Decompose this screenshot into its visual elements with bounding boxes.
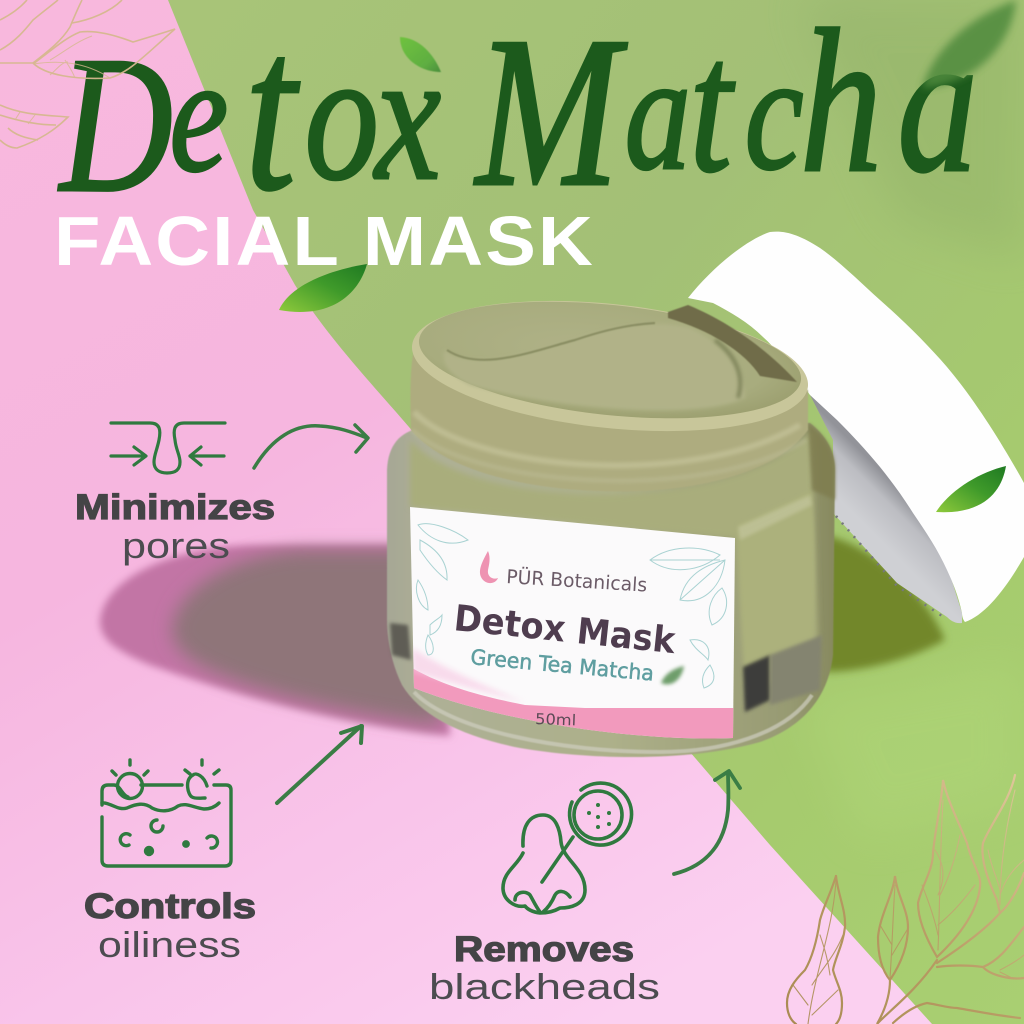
arrow: controls oiliness bbox=[277, 726, 362, 803]
label leaf decorations bbox=[416, 524, 727, 688]
title: D bbox=[58, 18, 173, 233]
label: removes blackheads bbox=[429, 930, 660, 1007]
label blurred leaf bbox=[661, 666, 684, 684]
lid white band bbox=[688, 232, 1024, 622]
gold leaves top left bbox=[0, 0, 175, 148]
label text: volume: 50ml bbox=[535, 710, 576, 729]
floating leaf: on lid bbox=[936, 466, 1006, 512]
jar lid bbox=[688, 232, 1024, 623]
cream surface bbox=[413, 285, 807, 435]
gold leaves bottom right bbox=[787, 775, 1024, 1024]
title bbox=[58, 0, 978, 239]
lid inner grey side bbox=[805, 385, 962, 623]
shadow of the jar on green bbox=[825, 535, 945, 672]
label: minimizes pores: Minimizes bbox=[75, 488, 275, 527]
cream creases bbox=[447, 323, 655, 360]
shadow of the jar on pink bbox=[100, 545, 450, 736]
floating leaf: beside subtitle bbox=[279, 264, 367, 312]
jar bottom glass rim bbox=[414, 692, 812, 752]
lid dotted thread bbox=[836, 516, 945, 618]
label pink band bbox=[414, 669, 734, 738]
title: o bbox=[305, 15, 379, 219]
icon: oily skin bbox=[102, 760, 231, 866]
jar body bbox=[387, 423, 835, 757]
label: controls oiliness: Controls bbox=[84, 887, 256, 926]
arrow: removes blackheads bbox=[674, 771, 740, 874]
jar bbox=[387, 284, 835, 757]
icon: pore bbox=[111, 423, 225, 473]
right shoulder shading bbox=[808, 423, 835, 500]
title: t bbox=[690, 2, 736, 212]
cream right panel bbox=[738, 492, 814, 684]
floating leaf: title bbox=[400, 37, 441, 72]
subtitle: FACIAL MASK bbox=[54, 202, 595, 280]
title: c bbox=[745, 22, 803, 204]
floating leaf: blurred top right bbox=[922, 0, 1016, 88]
jar label bbox=[405, 507, 735, 745]
soft light streaks on green bbox=[800, 0, 1024, 840]
title: x bbox=[373, 15, 441, 219]
label text: variant: Green Tea Matcha bbox=[470, 645, 655, 686]
jar neck bbox=[410, 350, 808, 491]
label: minimizes pores: pores bbox=[122, 525, 230, 566]
dark base corners bbox=[743, 655, 770, 712]
label: minimizes pores bbox=[75, 488, 275, 566]
label: removes blackheads: blackheads bbox=[429, 966, 660, 1007]
cream through body bbox=[410, 430, 818, 690]
label: controls oiliness: oiliness bbox=[98, 924, 241, 965]
title: e bbox=[170, 24, 228, 206]
title: M bbox=[473, 0, 628, 231]
label: removes blackheads: Removes bbox=[454, 930, 634, 969]
logo drop bbox=[480, 551, 498, 583]
lid gap shadow in jar bbox=[668, 305, 797, 382]
label text: brand: PÜR Botanicals bbox=[506, 565, 648, 597]
jar rim bbox=[406, 284, 814, 448]
icon: nose with blackheads bbox=[503, 783, 632, 913]
arrow: minimizes pores bbox=[254, 425, 368, 468]
title: a bbox=[625, 22, 691, 204]
label text: product: Detox Mask bbox=[452, 598, 678, 662]
label: controls oiliness bbox=[84, 887, 256, 965]
